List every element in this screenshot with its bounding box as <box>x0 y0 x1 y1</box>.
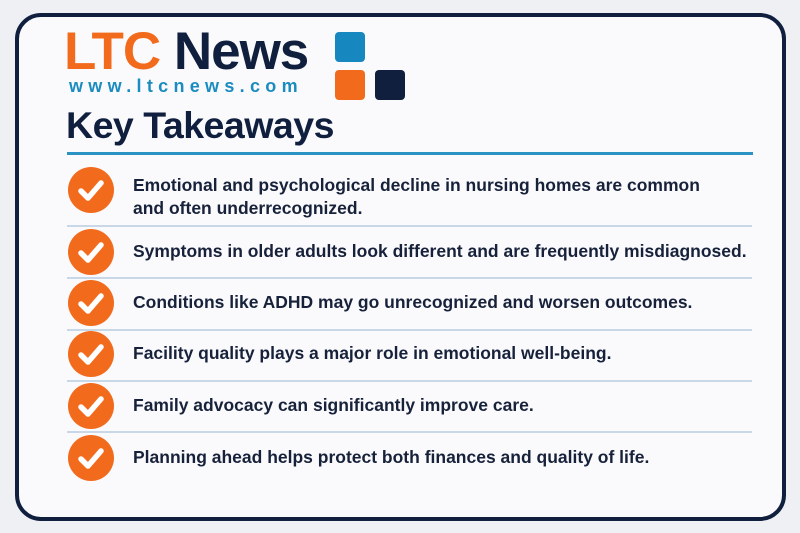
logo text: LTC News <box>64 22 308 81</box>
text: and often underrecognized. <box>133 198 362 218</box>
text: Conditions like ADHD may go unrecognized and worsen outcomes. <box>133 292 692 312</box>
item 3 <box>68 280 692 326</box>
icon: check <box>68 331 114 377</box>
text: Planning ahead helps protect both finances and quality of life. <box>133 447 649 467</box>
text: Family advocacy can significantly improve care. <box>133 395 534 415</box>
text: Emotional and psychological decline in nursing homes are common <box>133 175 700 195</box>
item 2 <box>68 229 747 275</box>
icon: check <box>68 229 114 275</box>
item 1 <box>68 167 700 218</box>
item 6 <box>68 435 649 481</box>
logo <box>64 22 405 100</box>
heading: Key Takeaways <box>66 104 334 146</box>
logo squares <box>335 32 405 100</box>
text: Symptoms in older adults look different and are frequently misdiagnosed. <box>133 241 747 261</box>
text <box>133 175 700 218</box>
text: Facility quality plays a major role in emotional well-being. <box>133 343 611 363</box>
item 5 <box>68 383 534 429</box>
icon: check <box>68 167 114 213</box>
icon: check <box>68 280 114 326</box>
item 4 <box>68 331 611 377</box>
url: www.ltcnews.com <box>69 76 303 96</box>
icon: check <box>68 383 114 429</box>
icon: check <box>68 435 114 481</box>
